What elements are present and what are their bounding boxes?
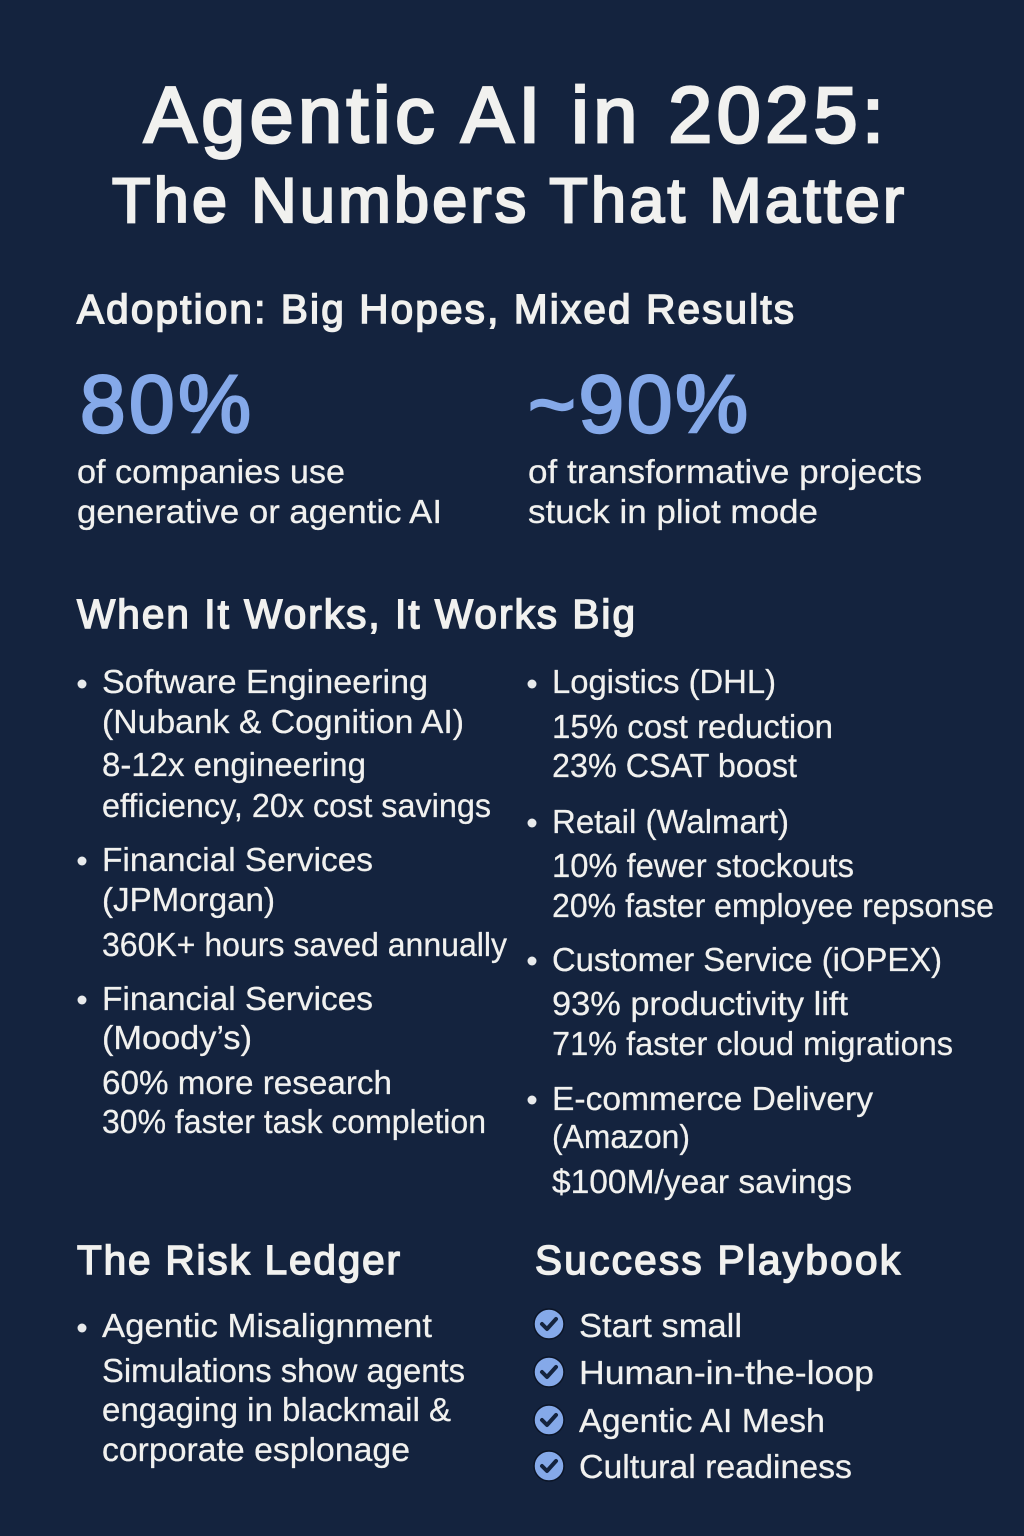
- list item: iOPEX: [528, 941, 953, 1062]
- list item: DHL: Logistics (DHL): [552, 663, 776, 700]
- list item: Moody's: [78, 980, 486, 1140]
- list item: software engineering: 8-12x engineering: [102, 746, 366, 783]
- heading: adoption: Adoption: Big Hopes, Mixed Results: [77, 286, 794, 332]
- list item: Moody's: 60% more research: [102, 1064, 392, 1101]
- stat: 80% of companies: generative or agentic AI: [77, 493, 442, 530]
- stat: 80% of companies: of companies use: [77, 453, 345, 490]
- list item: Moody's: (Moody’s): [102, 1019, 252, 1056]
- panel: adoption: [77, 286, 922, 530]
- list item: agentic misalignment: Simulations show agents: [102, 1352, 465, 1389]
- list item: JPMorgan: (JPMorgan): [102, 881, 275, 918]
- list item: DHL: 15% cost reduction: [552, 708, 833, 745]
- heading: success playbook: Success Playbook: [535, 1237, 901, 1283]
- checklist item: human-in-the-loop: Human-in-the-loop: [579, 1354, 874, 1391]
- list item: JPMorgan: [78, 841, 507, 963]
- list item: Amazon: (Amazon): [552, 1118, 690, 1155]
- list item: software engineering: [78, 663, 491, 824]
- stat: ~90% of projects: ~90%: [528, 359, 748, 450]
- list item: JPMorgan: 360K+ hours saved annually: [102, 926, 507, 963]
- list item: Walmart: Retail (Walmart): [552, 803, 789, 840]
- list item: agentic misalignment: corporate esplonage: [102, 1431, 410, 1468]
- stat: 80% of companies: 80%: [80, 359, 251, 450]
- list item: JPMorgan: Financial Services: [102, 841, 373, 878]
- list item: agentic misalignment: Agentic Misalignment: [102, 1307, 432, 1344]
- list item: Moody's: 30% faster task completion: [102, 1103, 486, 1140]
- title: Agentic AI in 2025:: [144, 70, 884, 159]
- list item: agentic misalignment: engaging in blackmail &: [102, 1391, 451, 1428]
- list item: software engineering: (Nubank & Cognition AI): [102, 703, 464, 740]
- checklist item: start small: Start small: [579, 1307, 742, 1344]
- stat: ~90% of projects: stuck in pliot mode: [528, 493, 818, 530]
- list item: iOPEX: Customer Service (iOPEX): [552, 941, 942, 978]
- list item: agentic misalignment: [78, 1307, 465, 1468]
- list item: software engineering: Software Engineering: [102, 663, 428, 700]
- stat: 80% of companies: [77, 359, 442, 530]
- checklist item: agentic AI mesh: Agentic AI Mesh: [579, 1402, 825, 1439]
- list item: Amazon: $100M/year savings: [552, 1163, 852, 1200]
- heading: when it works: When It Works, It Works Big: [77, 591, 635, 637]
- list item: DHL: [528, 663, 833, 784]
- heading: risk ledger: The Risk Ledger: [77, 1237, 400, 1283]
- list item: DHL: 23% CSAT boost: [552, 747, 797, 784]
- stat: ~90% of projects: [528, 359, 922, 530]
- panel: success playbook: [534, 1237, 901, 1485]
- list item: iOPEX: 93% productivity lift: [552, 985, 848, 1022]
- list item: iOPEX: 71% faster cloud migrations: [552, 1025, 953, 1062]
- list item: Walmart: 10% fewer stockouts: [552, 847, 854, 884]
- list item: software engineering: efficiency, 20x cost savings: [102, 787, 491, 824]
- title: The Numbers That Matter: [112, 166, 904, 236]
- list item: Walmart: 20% faster employee repsonse: [552, 887, 994, 924]
- list item: Moody's: Financial Services: [102, 980, 373, 1017]
- checklist item: cultural readiness: Cultural readiness: [579, 1448, 852, 1485]
- list item: Walmart: [528, 803, 994, 924]
- stat: ~90% of projects: of transformative projects: [528, 453, 922, 490]
- panel: risk ledger: [77, 1237, 465, 1468]
- panel: when it works: [77, 591, 994, 1200]
- list item: Amazon: E-commerce Delivery: [552, 1080, 874, 1117]
- list item: Amazon: [528, 1080, 874, 1200]
- title: [112, 70, 904, 236]
